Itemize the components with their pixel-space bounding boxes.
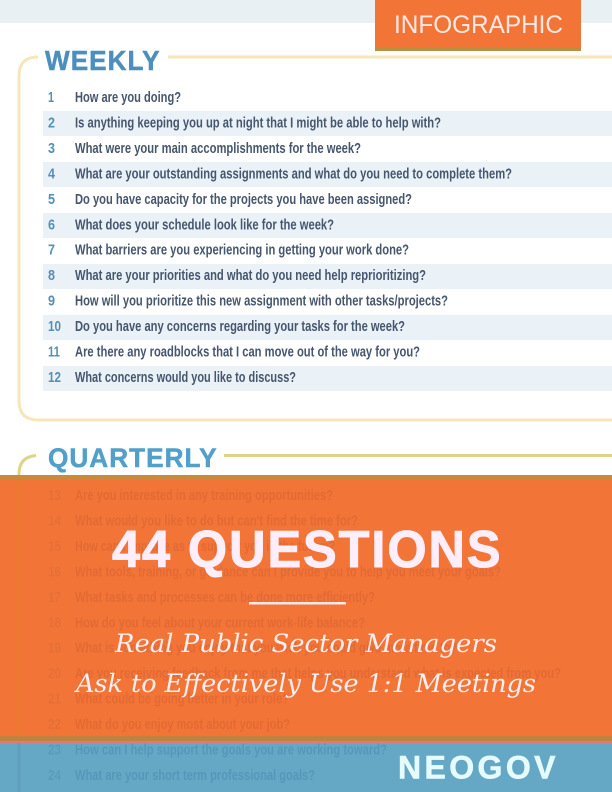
badge: infographic: INFOGRAPHIC <box>394 11 563 39</box>
subtitle: Real Public Sector Managers <box>114 629 497 658</box>
logo: NEOGOV: NEOGOV <box>398 750 559 786</box>
weekly question list: Do you have any concerns regarding your tasks for the week? <box>75 319 405 335</box>
weekly row stripes <box>43 111 612 391</box>
weekly question list <box>48 90 512 386</box>
panel: quarterly questions <box>19 443 612 480</box>
weekly question list: 2 <box>48 116 55 132</box>
weekly question list: What does your schedule look like for the week? <box>75 217 334 233</box>
weekly question list: 3 <box>48 141 55 157</box>
weekly question list: 8 <box>48 268 55 284</box>
weekly question list: How are you doing? <box>75 90 181 106</box>
faded quarterly questions beneath overlay: 21 <box>48 692 61 708</box>
weekly question list: 7 <box>48 243 55 259</box>
weekly question list: Do you have capacity for the projects you have been assigned? <box>75 192 412 208</box>
faded quarterly questions beneath overlay: 13 <box>48 488 61 504</box>
weekly question list: How will you prioritize this new assignment with other tasks/projects? <box>75 294 448 310</box>
faded quarterly questions beneath overlay: 19 <box>48 641 61 657</box>
title underline <box>249 602 346 604</box>
weekly question list: 5 <box>48 192 55 208</box>
faded quarterly questions beneath footer: How can I help support the goals you are working toward? <box>75 742 387 758</box>
subtitle: Ask to Effectively Use 1:1 Meetings <box>74 669 536 698</box>
faded quarterly questions beneath overlay: 14 <box>48 514 61 530</box>
faded quarterly questions beneath overlay: What could be going better in your role? <box>75 692 289 708</box>
faded quarterly questions beneath overlay: 16 <box>48 564 61 580</box>
faded quarterly questions beneath overlay: 22 <box>48 717 61 733</box>
faded quarterly questions beneath overlay: 15 <box>48 539 61 555</box>
weekly question list: Is anything keeping you up at night that I might be able to help with? <box>75 116 441 132</box>
title: 44 questions: 44 QUESTIONS <box>112 520 502 578</box>
header band <box>0 0 612 23</box>
panel: weekly questions <box>19 45 612 420</box>
faded quarterly questions beneath footer: 24 <box>48 768 61 784</box>
faded quarterly questions beneath overlay: Are you interested in any training opportunities? <box>75 488 333 504</box>
weekly question list: Are there any roadblocks that I can move out of the way for you? <box>75 344 420 360</box>
weekly question list: What barriers are you experiencing in getting your work done? <box>75 243 409 259</box>
weekly question list: 10 <box>48 319 61 335</box>
badge: infographic <box>375 0 581 51</box>
subtitle <box>74 629 536 698</box>
weekly question list: 9 <box>48 294 55 310</box>
heading: weekly: WEEKLY <box>45 45 161 76</box>
weekly question list: What concerns would you like to discuss? <box>75 370 296 386</box>
faded quarterly questions beneath overlay: 17 <box>48 590 61 606</box>
weekly question list: What were your main accomplishments for the week? <box>75 141 361 157</box>
faded quarterly questions beneath overlay: What is something you enjoy that you wish you could give more time to? <box>75 641 457 657</box>
faded quarterly questions beneath overlay: How can I improve as to support you in the future? <box>75 539 335 555</box>
faded quarterly questions beneath overlay: What do you enjoy most about your job? <box>75 717 290 733</box>
weekly question list: 4 <box>48 166 55 182</box>
weekly question list: 12 <box>48 370 61 386</box>
heading: quarterly: QUARTERLY <box>48 443 218 473</box>
faded quarterly questions beneath overlay: 20 <box>48 666 61 682</box>
faded quarterly questions beneath footer: 23 <box>48 742 61 758</box>
faded quarterly questions beneath footer <box>48 742 387 784</box>
faded quarterly questions beneath overlay <box>48 488 561 733</box>
weekly question list: 11 <box>48 344 60 360</box>
weekly question list: What are your priorities and what do you need help reprioritizing? <box>75 268 426 284</box>
faded quarterly questions beneath overlay: What would you like to do but can't find the time for? <box>75 514 358 530</box>
faded quarterly questions beneath overlay: How do you feel about your current work-life balance? <box>75 615 365 631</box>
faded quarterly questions beneath overlay: 18 <box>48 615 61 631</box>
faded quarterly questions beneath overlay: What tasks and processes can be done more efficiently? <box>75 590 375 606</box>
faded quarterly questions beneath footer: What are your short term professional goals? <box>75 768 315 784</box>
panel: blue footer <box>0 742 612 792</box>
weekly question list: 6 <box>48 217 55 233</box>
panel: orange title overlay <box>0 475 612 743</box>
weekly question list: 1 <box>48 90 54 106</box>
